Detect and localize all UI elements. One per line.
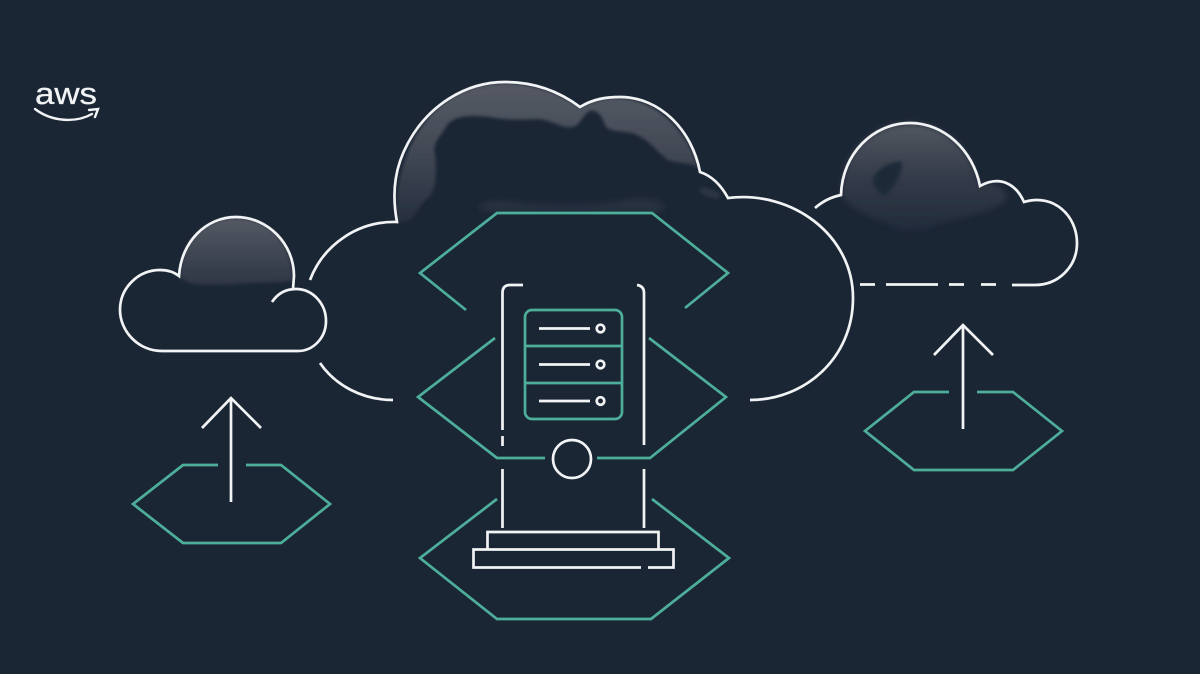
right cloud outline (815, 123, 1077, 285)
AWS logo (35, 76, 98, 120)
faint band under center cloud (478, 198, 665, 212)
cloud highlight: left (180, 218, 293, 285)
logo smile (35, 109, 98, 120)
tower button (553, 440, 591, 478)
left up arrow (202, 398, 261, 502)
left hexagon (133, 465, 330, 543)
dashed baseline (860, 283, 996, 286)
tower outline (502, 285, 644, 528)
cloud highlight: center (396, 83, 722, 222)
teal hexagon bottom (420, 499, 729, 619)
dark spot (873, 162, 902, 196)
left cloud outline (120, 217, 326, 351)
tower plinth (474, 550, 674, 568)
right hexagon (865, 392, 1062, 470)
faint bump highlight (698, 185, 722, 201)
server tower (474, 285, 674, 568)
center cloud outline (310, 82, 853, 400)
server rack (525, 310, 622, 419)
rack frame (525, 310, 622, 419)
cloud highlight: right (842, 124, 1007, 230)
logo wordmark: aws (35, 76, 97, 111)
tower base (488, 532, 658, 549)
rack indicators (539, 325, 604, 405)
teal hexagon top (420, 213, 728, 310)
teal hexagon middle (418, 338, 726, 458)
right up arrow (934, 325, 993, 429)
